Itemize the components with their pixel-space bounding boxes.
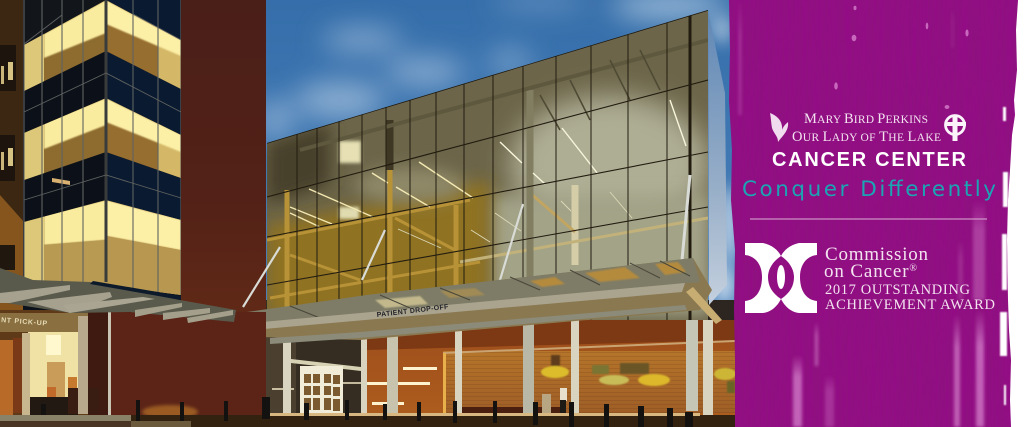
bench and visitors bbox=[460, 388, 567, 415]
tagline: Conquer Differently bbox=[742, 177, 996, 202]
white paint gaps bbox=[1000, 107, 1008, 405]
lobby wall lights bbox=[272, 367, 437, 405]
entrance doors bbox=[291, 359, 361, 414]
left wing of building bbox=[0, 0, 26, 320]
ground and bollards bbox=[0, 397, 735, 427]
tower left lit floors bbox=[24, 0, 106, 290]
brick tower wall bbox=[181, 0, 266, 330]
pick-up sign: NT PICK-UP bbox=[1, 317, 48, 328]
award text: ® bbox=[909, 263, 917, 274]
pick-up canopy bbox=[0, 268, 236, 323]
pick-up windows bbox=[0, 332, 99, 415]
tower right lit floors bbox=[106, 0, 181, 295]
logo name text: OUR LADY OF THE LAKE bbox=[792, 129, 941, 145]
logo: Commission on Cancer bbox=[745, 243, 817, 313]
award text: Commission bbox=[825, 244, 928, 265]
logo name text bbox=[792, 111, 941, 145]
diagonal canopy rods bbox=[243, 175, 690, 307]
canopy sign: PATIENT DROP-OFF bbox=[376, 304, 449, 319]
award text: 2017 OUTSTANDING bbox=[825, 282, 971, 298]
right side white page area bbox=[1000, 0, 1024, 427]
cancer center heading: CANCER CENTER bbox=[772, 149, 967, 171]
tower mullions bbox=[24, 0, 181, 295]
canopy skylight panes bbox=[375, 262, 686, 308]
logo: Mary Bird Perkins Our Lady of the Lake Cancer Center bbox=[770, 111, 967, 171]
tower dark spandrels bbox=[24, 0, 181, 222]
background sky with clouds bbox=[257, 0, 736, 320]
patient drop-off canopy bbox=[230, 258, 722, 344]
award text: on Cancer bbox=[824, 261, 909, 282]
atrium lit interior bbox=[267, 95, 710, 320]
divider line bbox=[750, 218, 987, 220]
icon: flame bbox=[770, 113, 788, 142]
glass atrium bbox=[243, 0, 727, 320]
award text: ACHIEVEMENT AWARD bbox=[825, 297, 995, 313]
icon: cross in circle bbox=[945, 116, 966, 141]
award text bbox=[824, 244, 995, 313]
atrium mullions bbox=[267, 15, 708, 320]
lower storefront bbox=[0, 310, 266, 419]
atrium light tubes bbox=[290, 100, 686, 248]
logo name text: MARY BIRD PERKINS bbox=[804, 111, 928, 127]
magenta brush-stroke panel bbox=[725, 0, 1024, 427]
wall flower planters bbox=[541, 355, 736, 393]
lobby wall bbox=[266, 290, 736, 418]
paint streaks bbox=[739, 0, 985, 427]
glass tower bbox=[23, 0, 182, 320]
lobby columns bbox=[283, 290, 713, 418]
paint flecks bbox=[834, 6, 969, 109]
atrium structure beams bbox=[267, 40, 708, 310]
